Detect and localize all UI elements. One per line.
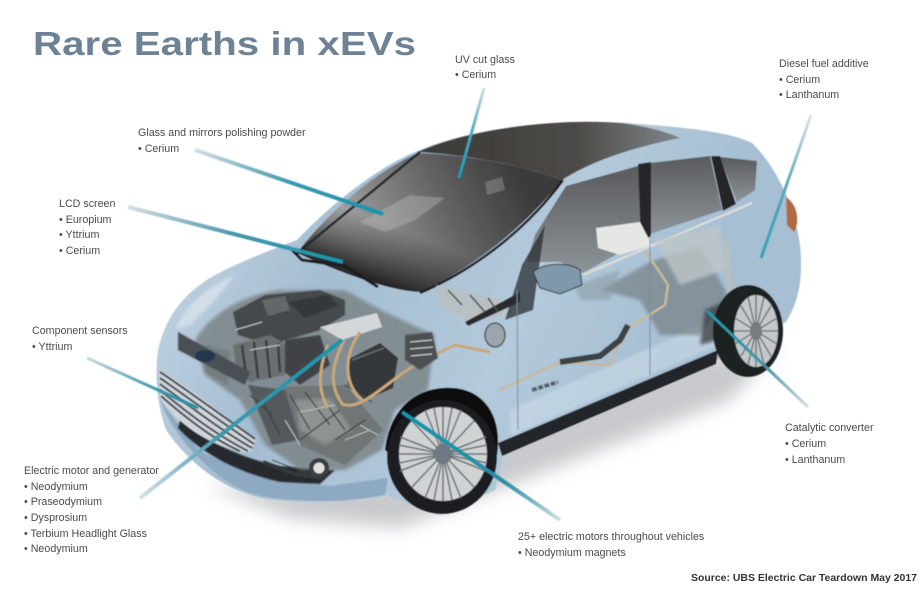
- label: 25+ electric motors: [518, 531, 704, 559]
- source note: Source: UBS Electric Car Teardown May 2017: [691, 572, 917, 584]
- title: Rare Earths in xEVs: [33, 26, 416, 63]
- hood highlight: [175, 275, 235, 330]
- label: component sensors: • Yttrium: [32, 341, 72, 353]
- ground shadow: [205, 350, 775, 528]
- rear light: [786, 197, 797, 232]
- label: electric motor and generator: • Terbium Headlight Glass: [24, 528, 147, 540]
- label: diesel fuel additive: • Lanthanum: [779, 89, 839, 101]
- label: electric motor and generator: • Neodymium: [24, 481, 88, 493]
- grille: [160, 370, 256, 452]
- label: glass and mirrors: [138, 127, 306, 155]
- label: LCD screen: • Europium: [59, 214, 112, 226]
- engine bay: [195, 290, 490, 480]
- callout line: catalytic converter: [707, 311, 808, 407]
- rear wheel: [713, 285, 783, 377]
- label: catalytic converter: [785, 422, 874, 466]
- label: electric motor and generator: • Praseodymium: [24, 496, 102, 508]
- speaker: [485, 323, 505, 347]
- silver inverter box: [320, 313, 382, 340]
- callout line: LCD screen: [128, 207, 343, 262]
- interior parts: [596, 222, 652, 255]
- label: UV cut glass: UV cut glass: [455, 54, 515, 66]
- label: UV cut glass: [455, 54, 515, 81]
- label: catalytic converter: • Lanthanum: [785, 454, 845, 466]
- label: glass and mirrors: • Cerium: [138, 143, 179, 155]
- roof: [418, 122, 680, 180]
- lower engine: [283, 385, 383, 465]
- exhaust line: [500, 250, 668, 390]
- lower hose: [263, 462, 322, 478]
- label: electric motor and generator: [24, 465, 159, 555]
- callout line: component sensors: [87, 358, 198, 408]
- lower intake: [178, 420, 335, 484]
- mirror: [533, 264, 582, 294]
- upper grille and badge: [178, 332, 250, 385]
- label: diesel fuel additive: [779, 58, 869, 101]
- label: 25+ electric motors: • Neodymium magnets: [518, 547, 626, 559]
- label: 25+ electric motors: 25+ electric motors throughout vehicles: [518, 531, 704, 543]
- engine cover: [233, 290, 345, 345]
- dark battery box: [347, 343, 398, 400]
- front bumper lower: [160, 400, 388, 501]
- label: electric motor and generator: Electric motor and generator: [24, 465, 159, 477]
- callout line: polishing powder: [195, 150, 383, 214]
- car illustration: [157, 122, 801, 528]
- label: LCD screen: LCD screen: [59, 198, 115, 210]
- windshield: [297, 153, 562, 292]
- label: catalytic converter: Catalytic converter: [785, 422, 874, 434]
- label: LCD screen: [59, 198, 115, 257]
- front wheel: [385, 388, 498, 514]
- label: electric motor and generator: • Neodymium: [24, 543, 88, 555]
- callout line: UV cut glass: [459, 88, 484, 178]
- label: component sensors: Component sensors: [32, 325, 128, 337]
- label: diesel fuel additive: Diesel fuel additive: [779, 58, 869, 70]
- label: UV cut glass: • Cerium: [455, 69, 496, 81]
- door badge: [532, 382, 558, 390]
- label: LCD screen: • Cerium: [59, 245, 100, 257]
- orange cables: [320, 332, 490, 408]
- A-pillar: [420, 180, 563, 293]
- label: electric motor and generator: • Dysprosium: [24, 512, 87, 524]
- door seams: [517, 240, 650, 430]
- dash and door mechanism: [436, 285, 505, 322]
- suspension coil: [405, 332, 438, 370]
- callout line: electric motor: [140, 340, 342, 498]
- intake manifold: [233, 335, 295, 382]
- side windows: [527, 166, 642, 273]
- clutter strokes: [250, 385, 372, 480]
- label: diesel fuel additive: • Cerium: [779, 74, 820, 86]
- label: catalytic converter: • Cerium: [785, 438, 826, 450]
- car body: [157, 122, 801, 515]
- fog lamp: [309, 458, 329, 478]
- label: component sensors: [32, 325, 128, 353]
- label: LCD screen: • Yttrium: [59, 229, 99, 241]
- windshield frame and wipers: [296, 152, 420, 254]
- label: glass and mirrors: Glass and mirrors polishing powder: [138, 127, 306, 139]
- callout line: 25+ motors: [402, 412, 560, 520]
- door lower highlight: [510, 320, 715, 436]
- underbody sill: [498, 350, 718, 456]
- callout line: diesel additive: [761, 115, 811, 258]
- belt line: [583, 203, 752, 275]
